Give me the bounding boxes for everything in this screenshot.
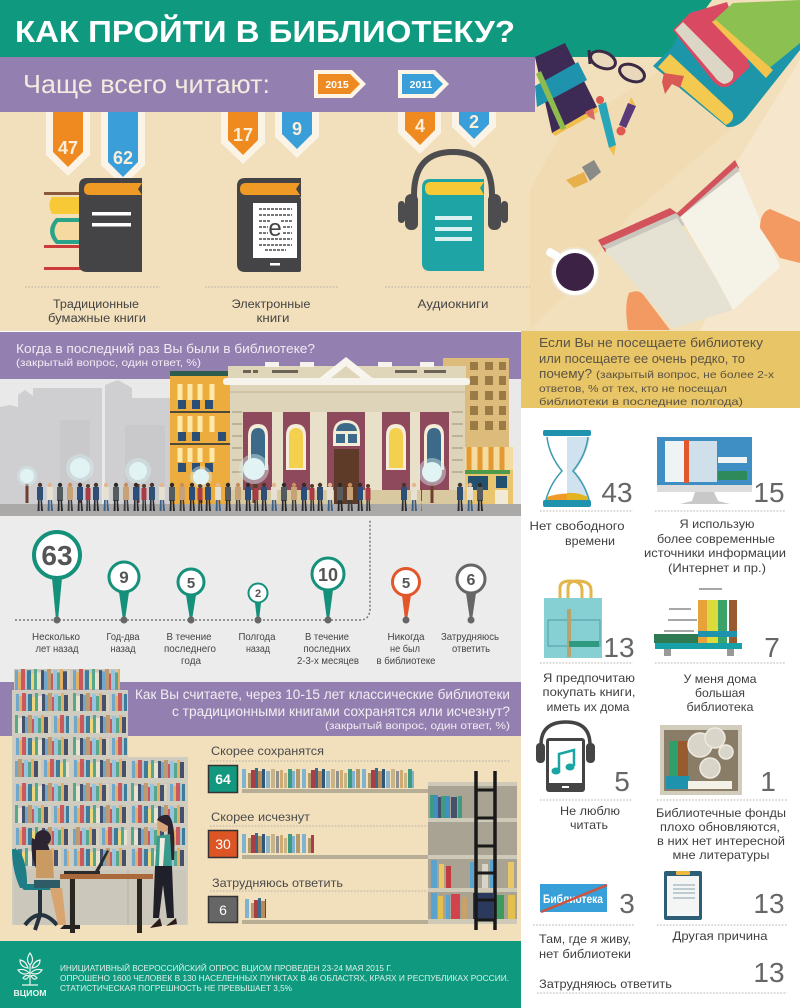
label: источники информации — [644, 546, 786, 560]
value — [208, 830, 238, 858]
label — [164, 631, 216, 667]
illustration: right tower and shop — [443, 358, 513, 505]
value: 64 — [215, 771, 231, 787]
label: Там, где я живу, — [539, 932, 631, 946]
panel: why not visiting heading — [521, 331, 800, 408]
ribbon values: printed books — [46, 112, 145, 186]
question text: почему? — [539, 366, 592, 381]
illustration: yellow building — [170, 371, 230, 505]
label: Затрудняюсь — [441, 631, 499, 643]
methodology note — [60, 964, 509, 993]
pin: half a year ago 2: 2 — [255, 588, 261, 600]
logo: ВЦИОМ — [14, 989, 47, 998]
label: плохо обновляются, — [660, 820, 780, 834]
pin: last year 5 — [164, 569, 216, 667]
label — [656, 806, 786, 862]
value: 30 — [215, 836, 231, 852]
label: лет назад — [36, 643, 78, 655]
value: 43 — [601, 477, 633, 508]
label — [539, 932, 631, 961]
label: printed books: бумажные книги — [48, 313, 146, 325]
ground — [0, 504, 521, 516]
ribbon values: e-books: 9 — [292, 119, 302, 139]
label: Несколько — [32, 631, 80, 643]
icon: crossed out library sign: Библиотека — [543, 892, 603, 906]
label — [560, 804, 620, 832]
heading: most read: Чаще всего читают: — [23, 69, 270, 99]
question text: Если Вы не посещаете библиотеку — [539, 335, 764, 350]
value — [208, 766, 238, 792]
label: printed books: Традиционные — [53, 299, 139, 311]
label: Скорее сохранятся — [211, 744, 324, 758]
header teal shape behind books — [0, 0, 712, 57]
reason: no library where I live — [533, 884, 635, 961]
label: 2-3-х месяцев — [297, 655, 359, 667]
note: (закрытый вопрос, один ответ, %) — [16, 357, 201, 369]
bar: likely to survive — [208, 744, 510, 793]
icon: glasses — [588, 48, 647, 85]
value: 15 — [753, 477, 785, 508]
question text: или посещаете ее очень редко, то — [539, 351, 745, 366]
question text — [539, 335, 775, 408]
books bar — [242, 833, 314, 853]
label — [530, 519, 625, 548]
label: Год-два — [106, 631, 140, 643]
pin: one-two years ago 9: 9 — [119, 568, 129, 587]
question text: (закрытый вопрос, не более 2-х — [596, 369, 775, 381]
label: последнего — [164, 643, 216, 655]
label: мне литературы — [672, 848, 770, 862]
pin: last 2-3 months 10: 10 — [318, 565, 338, 585]
question text — [135, 687, 510, 732]
icon: dark notebook — [535, 43, 598, 136]
icon: tablet with headphones — [536, 722, 595, 792]
label: времени — [565, 534, 615, 548]
icon: home bookshelf — [654, 589, 742, 656]
label: e-books — [232, 299, 310, 325]
question text: с традиционными книгами сохранятся или исчезнут? — [172, 704, 510, 719]
methodology note: СТАТИСТИЧЕСКАЯ ПОГРЕШНОСТЬ НЕ ПРЕВЫШАЕТ 3,5% — [60, 984, 292, 993]
panel: section 3 background — [0, 736, 521, 941]
label: Не люблю — [560, 804, 620, 818]
illustration: desk with books, glasses, pencils, coffee and open book — [0, 0, 800, 330]
reason: large home library — [654, 589, 785, 714]
label: Я использую — [680, 517, 754, 531]
label — [441, 631, 499, 655]
icon: stack of paper books — [44, 178, 142, 272]
panel: section 3 heading band — [0, 682, 521, 736]
icon: pencils — [596, 96, 636, 156]
icon: big teal book — [653, 10, 800, 127]
label: Никогда — [388, 631, 425, 643]
label: ответить — [452, 643, 490, 655]
label — [238, 631, 276, 655]
label: в них нет интересной — [657, 834, 785, 848]
label: e-books: Электронные — [232, 299, 310, 311]
pin: several years ago 63: 63 — [41, 540, 73, 571]
label: библиотека — [686, 700, 754, 714]
label: Полгода — [238, 631, 276, 643]
pin: one-two years ago 9 — [106, 562, 140, 655]
book format dividers — [25, 286, 530, 288]
ribbon values: e-books: 17 — [233, 125, 253, 145]
value: 7 — [764, 632, 780, 663]
label: назад — [110, 643, 136, 655]
label: более современные — [657, 532, 775, 546]
label — [106, 631, 140, 655]
label — [644, 517, 786, 575]
ribbon values: audiobooks — [398, 112, 496, 154]
bar: likely to disappear — [208, 810, 428, 859]
pin: never been 5 — [376, 568, 436, 667]
reason: hard to answer — [537, 957, 787, 993]
illustration: street lamps — [17, 454, 446, 503]
desk and laptop — [60, 850, 153, 933]
methodology note: ОПРОШЕНО 1600 ЧЕЛОВЕК В 130 НАСЕЛЕННЫХ ПУНКТАХ В 46 ОБЛАСТЯХ, КРАЯХ И РЕСПУБЛИКАХ РОССИИ. — [60, 974, 509, 983]
label: в библиотеке — [376, 655, 436, 667]
illustration: library building — [223, 357, 470, 505]
value: 13 — [753, 957, 785, 988]
icon: monitor — [657, 437, 752, 504]
icon: shopping bag — [544, 581, 602, 658]
reason: prefer buying books — [540, 581, 636, 714]
icon: dusty shelf with cobweb — [660, 725, 742, 795]
label: читать — [570, 818, 608, 832]
label — [542, 671, 636, 714]
reason: dislike reading — [536, 722, 633, 832]
label: последних — [304, 643, 351, 655]
ribbon values: printed books: 47 — [58, 138, 78, 158]
icon: red book — [673, 2, 750, 87]
label: (Интернет и пр.) — [668, 561, 766, 575]
illustration: people queue — [36, 482, 484, 512]
reason: library holdings rarely updated — [656, 725, 787, 862]
ribbon values: printed books: 62 — [113, 148, 133, 168]
pin: several years ago 63 — [32, 532, 80, 655]
seated reader with chair — [12, 830, 80, 930]
panel: desk background — [0, 0, 800, 332]
label: В течение — [305, 631, 349, 643]
pin: hard to answer 6: 6 — [467, 572, 476, 589]
reason: modern information sources — [644, 437, 786, 575]
label: Библиотечные фонды — [656, 806, 786, 820]
panel: right column background — [521, 408, 800, 1008]
legend flag 2015: 2015 — [325, 79, 349, 91]
icon: e-book — [237, 178, 301, 272]
label: нет библиотеки — [539, 947, 631, 961]
pin: last 2-3 months 10 — [297, 558, 359, 667]
reason: other — [657, 871, 787, 943]
label: В течение — [166, 631, 212, 643]
panel: section 2 heading band — [0, 332, 521, 379]
question text: ответов, % от тех, кто не посещал — [539, 383, 727, 395]
pin: hard to answer 6 — [441, 565, 499, 655]
label — [32, 631, 80, 655]
ribbon values: e-books — [221, 112, 319, 164]
value: 5 — [614, 766, 630, 797]
logo — [14, 953, 47, 998]
label: Нет свободного — [530, 519, 625, 533]
icon: hourglass — [543, 430, 591, 507]
panel: footer — [0, 941, 521, 1008]
icon: audiobook with headphones — [398, 152, 508, 271]
label: не был — [390, 643, 420, 655]
label: иметь их дома — [546, 700, 630, 714]
label: Я предпочитаю — [543, 671, 635, 685]
ribbon values: audiobooks: 2 — [469, 112, 479, 132]
pin: last year 5: 5 — [187, 575, 195, 592]
panel: section 2 background — [0, 331, 521, 683]
label: года — [181, 655, 201, 667]
question text: (закрытый вопрос, один ответ, %) — [325, 720, 510, 732]
label: printed books — [48, 299, 146, 325]
pin: half a year ago 2 — [238, 584, 276, 655]
label — [684, 672, 757, 714]
label: audiobooks: Аудиокниги — [418, 299, 488, 311]
icon: open book with hands — [598, 160, 800, 330]
label: большая — [695, 686, 745, 700]
books bar — [245, 898, 266, 918]
heading: Когда в последний раз Вы были в библиотеке? — [16, 341, 315, 356]
timeline line — [15, 520, 370, 620]
icon: clipboard — [664, 871, 702, 920]
illustration: city skyline — [0, 380, 170, 505]
bar: hard to answer — [208, 876, 428, 924]
label: e-books: книги — [256, 313, 290, 325]
value: 13 — [753, 888, 785, 919]
illustration: shelf with ladder — [428, 771, 517, 930]
question text: Как Вы считаете, через 10-15 лет классические библиотеки — [135, 687, 510, 702]
icon: coffee cup — [545, 247, 600, 297]
value: 3 — [619, 888, 635, 919]
standing librarian — [150, 815, 177, 928]
ribbon values: audiobooks: 4 — [415, 116, 425, 136]
label: Другая причина — [672, 929, 768, 943]
reason: no free time — [530, 430, 633, 548]
label: Скорее исчезнут — [211, 810, 311, 824]
label — [297, 631, 359, 667]
legend flag 2011: 2011 — [410, 79, 433, 91]
value: 13 — [603, 632, 635, 663]
methodology note: ИНИЦИАТИВНЫЙ ВСЕРОССИЙСКИЙ ОПРОС ВЦИОМ ПРОВЕДЕН 23-24 МАЯ 2015 Г. — [60, 964, 392, 973]
illustration: library bookshelves and readers — [12, 669, 188, 933]
legend flag 2015 — [314, 70, 366, 98]
label: назад — [246, 643, 270, 655]
books bar — [242, 768, 414, 788]
pin: never been 5: 5 — [402, 575, 410, 592]
value: 6 — [219, 902, 227, 918]
value — [208, 896, 238, 922]
label — [376, 631, 436, 667]
icon: sharpener — [566, 160, 601, 188]
label: Затрудняюсь ответить — [539, 977, 672, 991]
value: 1 — [760, 766, 776, 797]
panel: top purple band — [0, 57, 535, 112]
label: покупать книги, — [542, 685, 636, 699]
question text: библиотеки в последние полгода) — [539, 396, 743, 408]
label: У меня дома — [684, 672, 757, 686]
label: Затрудняюсь ответить — [212, 876, 343, 890]
legend flag 2011 — [398, 70, 449, 98]
icon: green book — [712, 0, 800, 78]
title: КАК ПРОЙТИ В БИБЛИОТЕКУ? — [15, 13, 515, 49]
icon: e-book: e — [268, 215, 282, 242]
